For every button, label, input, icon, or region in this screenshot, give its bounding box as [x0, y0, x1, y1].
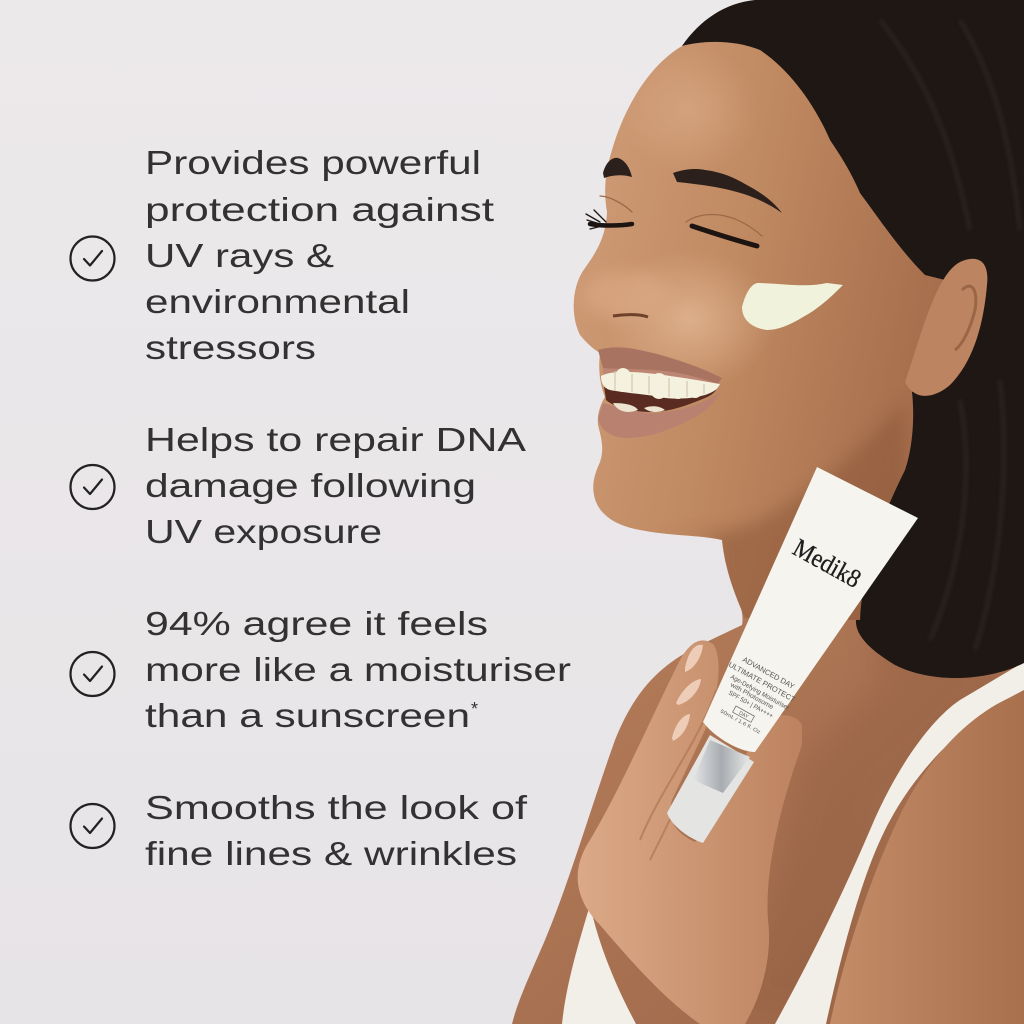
- label text: SPF 50+ | PA++++: [727, 690, 774, 720]
- nose: [590, 274, 650, 314]
- text block: 94% agree it feels: [145, 605, 488, 642]
- eyebrows: [603, 158, 782, 213]
- label text: Age-Defying Moisturiser: [729, 674, 791, 712]
- torso and shoulders: [512, 560, 1024, 1024]
- nozzle cap: [667, 735, 754, 843]
- label text: [719, 655, 797, 736]
- label text: ADVANCED DAY: [741, 655, 796, 691]
- benefit 4: [70, 789, 528, 872]
- benefit 2: [70, 421, 526, 550]
- text block: [145, 421, 526, 550]
- text block: more like a moisturiser: [145, 651, 571, 688]
- text block: [145, 144, 494, 366]
- white dress: [562, 662, 1024, 1024]
- text block: UV exposure: [145, 513, 382, 550]
- mouth interior: [604, 386, 716, 412]
- benefits list: [70, 144, 571, 872]
- icon: check circle: [70, 465, 114, 509]
- text block: damage following: [145, 467, 476, 504]
- mouth: [598, 347, 722, 438]
- lower teeth: [613, 403, 665, 412]
- text block: [145, 605, 571, 734]
- lower lip: [598, 392, 720, 438]
- jaw shadow: [704, 412, 907, 620]
- text block: *: [471, 699, 478, 719]
- hair highlights: [880, 20, 1020, 650]
- face and neck: [574, 42, 944, 620]
- text block: Smooths the look of: [145, 789, 528, 826]
- icon: check circle: [70, 804, 114, 848]
- hair: [682, 0, 1024, 678]
- tube body: [703, 467, 918, 752]
- nostril line: [613, 315, 648, 317]
- ear: [905, 259, 987, 396]
- eyes: [586, 196, 762, 246]
- text block: Provides powerful: [145, 144, 481, 181]
- text block: protection against: [145, 191, 494, 228]
- brand: Medik8: [788, 533, 866, 594]
- label text: 50mL / 1.6 fl. Oz: [719, 709, 762, 736]
- product tube: [667, 467, 918, 843]
- label text: with Photosome: [728, 681, 775, 711]
- benefit 1: [70, 144, 494, 366]
- text block: UV rays &: [145, 237, 334, 274]
- text block: than a sunscreen: [145, 697, 470, 734]
- upper lip: [598, 347, 722, 384]
- icon: check circle: [70, 652, 114, 696]
- day box: DAY: [738, 710, 750, 721]
- benefit 3: [70, 605, 571, 734]
- arm: [830, 692, 1024, 1024]
- cheek highlight: [628, 266, 757, 372]
- text block: fine lines & wrinkles: [145, 835, 517, 872]
- label text: ULTIMATE PROTECT: [727, 660, 797, 704]
- text block: Helps to repair DNA: [145, 421, 526, 458]
- upper teeth: [601, 368, 720, 399]
- text block: [145, 789, 528, 872]
- neck shadow: [720, 540, 1024, 1024]
- text block: stressors: [145, 329, 316, 366]
- icon: check circle: [70, 236, 114, 280]
- day box: [732, 706, 754, 723]
- gums: [603, 366, 718, 392]
- text block: environmental: [145, 283, 410, 320]
- hand and fingers: [578, 640, 802, 1024]
- cream swatch: [742, 283, 843, 330]
- photo: smiling woman holding product: [512, 0, 1024, 1024]
